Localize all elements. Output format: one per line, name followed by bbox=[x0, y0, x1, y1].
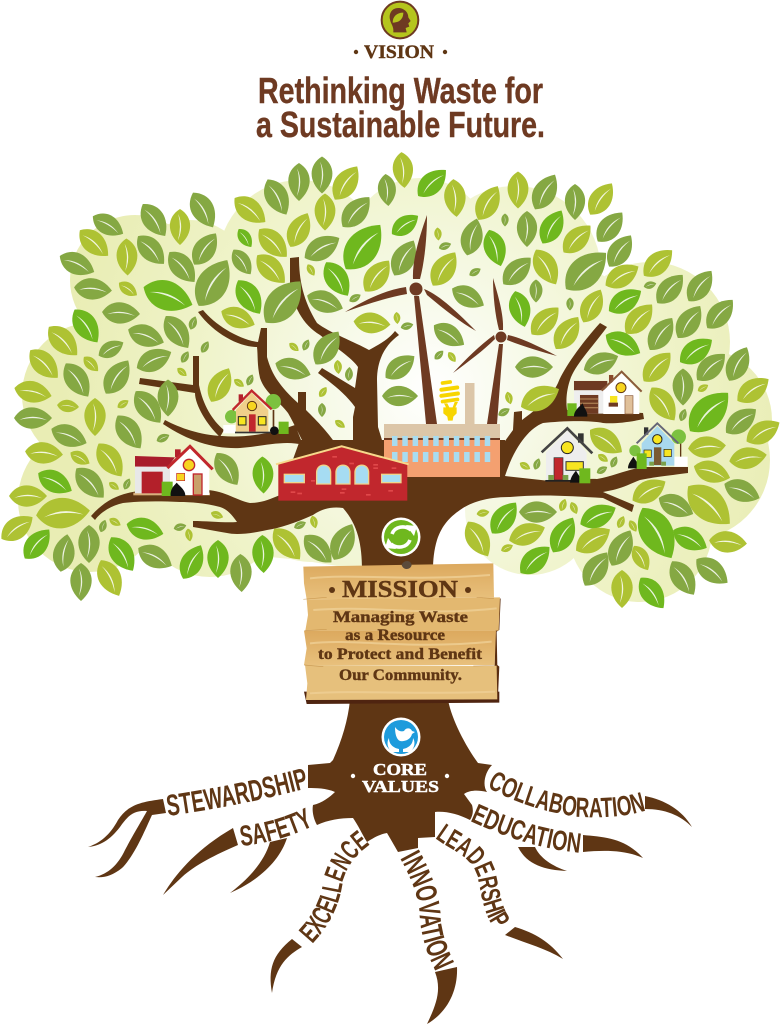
icon: core values badge bbox=[382, 718, 420, 756]
house: brown roof with garage bbox=[567, 372, 642, 417]
leaves: upper right canopy bbox=[457, 169, 781, 451]
core value: innovation: INNOVATION bbox=[400, 850, 454, 970]
title: Rethinking Waste for bbox=[258, 70, 543, 111]
lower trunk and root flare bbox=[308, 700, 492, 852]
house: yellow with red roof bbox=[223, 391, 289, 435]
wind turbine: small bbox=[453, 278, 557, 424]
core value: stewardship bbox=[166, 769, 306, 816]
panel: mission wooden sign: to Protect and Benefit bbox=[318, 646, 483, 663]
leaves: upper left canopy bbox=[12, 156, 398, 455]
core value: leadership: LEADERSHIP bbox=[436, 824, 509, 924]
root tails bbox=[88, 796, 692, 1024]
panel: mission wooden sign bbox=[303, 561, 501, 704]
core values heading: VALUES bbox=[362, 777, 439, 796]
red brick building bbox=[276, 446, 409, 501]
house: white with dark roof bbox=[542, 428, 592, 483]
icon: light bulb bbox=[439, 380, 460, 421]
title bbox=[256, 70, 545, 145]
panel: mission wooden sign: MISSION bbox=[342, 577, 459, 603]
panel: mission wooden sign: Our Community. bbox=[339, 667, 462, 684]
icon: recycling badge bbox=[382, 518, 420, 556]
core value: stewardship: STEWARDSHIP bbox=[166, 769, 306, 816]
panel: mission wooden sign: as a Resource bbox=[345, 627, 445, 644]
factory bbox=[384, 383, 500, 477]
house: blue bbox=[628, 423, 688, 469]
vision heading: VISION bbox=[364, 42, 434, 63]
core value: safety: SAFETY bbox=[240, 808, 310, 846]
canopy background bbox=[18, 178, 772, 602]
wind turbine: large bbox=[345, 215, 476, 424]
core values heading: CORE bbox=[373, 760, 427, 779]
tree branches and upper trunk bbox=[91, 257, 688, 570]
leaves: top centre canopy bbox=[377, 151, 489, 406]
leaves: lower right canopy bbox=[458, 421, 769, 615]
panel: mission wooden sign: Managing Waste bbox=[333, 609, 468, 626]
leaves: lower left canopy bbox=[0, 437, 362, 601]
core values heading bbox=[351, 760, 449, 796]
core value: education: EDUCATION bbox=[471, 804, 581, 853]
core value: excellence: EXCELLENCE bbox=[298, 830, 370, 944]
core value: safety bbox=[240, 808, 310, 846]
vision icon bbox=[382, 2, 418, 38]
core value: collaboration: COLLABORATION bbox=[490, 772, 645, 818]
title: a Sustainable Future. bbox=[256, 104, 545, 145]
core value: innovation bbox=[400, 850, 454, 970]
house: white with red roof and garage bbox=[133, 446, 213, 496]
